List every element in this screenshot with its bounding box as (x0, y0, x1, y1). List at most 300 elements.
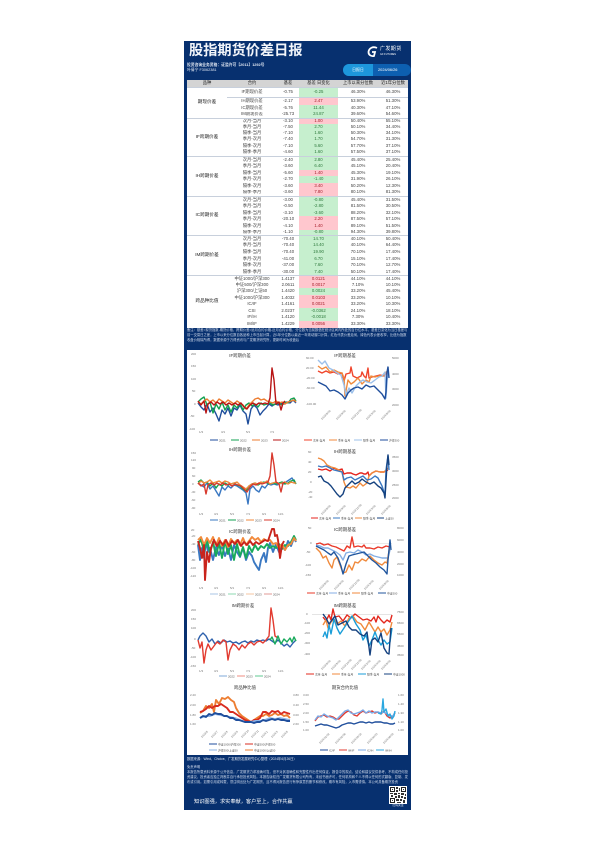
date pill: 2024/06/26 (378, 67, 397, 72)
basis and spread table: -3.60 (283, 183, 293, 188)
chart: cross-index ratio: 沪深300/上证50 (218, 748, 238, 752)
chart: IF basis: -20.00 (306, 376, 315, 380)
chart: IH spread seasonal: 2023 (255, 518, 262, 522)
chart: IF basis: 60.00 (306, 356, 314, 360)
chart: IF spread seasonal: 2021 (219, 438, 226, 442)
chart: cross-index ratio: 2023/9 (230, 730, 239, 739)
basis and spread table: 沪深300/上证50 (237, 288, 267, 293)
chart: IM basis: 2023/12/26 (350, 658, 363, 671)
basis and spread table: 33.20% (351, 288, 365, 293)
basis and spread table: 1.40 (314, 223, 323, 228)
basis and spread table: -3.10 (283, 210, 293, 215)
chart: IC spread seasonal: 1/3 (199, 586, 204, 590)
chart: IF basis: 2023/9/26 (335, 409, 347, 421)
chart: cross-index ratio: 2023/6 (200, 730, 209, 739)
chart: basket ratio: 1.00 (398, 728, 404, 732)
basis and spread table: -7.40 (283, 136, 293, 141)
chart: IC spread seasonal: -80 (191, 558, 196, 562)
basis and spread table: 37.10% (386, 143, 400, 148)
basis and spread table: 14.70 (313, 236, 324, 241)
basis and spread table: 次月-当月 (243, 197, 261, 202)
chart: basket ratio: IC/IH (367, 748, 373, 752)
basis and spread table: -20.10 (282, 216, 294, 221)
basis and spread table: 30.50% (386, 203, 400, 208)
chart: basket ratio: 2024/02/06 (334, 732, 347, 745)
chart: IM spread seasonal: 2022 (228, 674, 235, 678)
chart: IM basis: 3500 (397, 653, 404, 657)
basis and spread table: 隔季-当月 (243, 210, 261, 215)
basis and spread table: 1.60 (314, 149, 323, 154)
chart: IF spread seasonal: 5/1 (246, 430, 251, 434)
basis and spread table: -2.70 (283, 176, 293, 181)
chart: IC basis: 中证500 (387, 592, 398, 596)
basis and spread table: IH期现价差 (241, 98, 263, 103)
chart: IM basis: 2023/10/26 (340, 658, 353, 671)
basis and spread table: 19.10% (386, 170, 400, 175)
basis and spread table: 2.47 (314, 98, 323, 103)
basis and spread table: 40.10% (351, 236, 365, 241)
chart: IC basis: -150 (305, 573, 311, 577)
chart: IF basis: 2024/3/26 (365, 409, 377, 421)
basis and spread table: 2.20 (314, 216, 323, 221)
basis and spread table: 51.50% (386, 223, 400, 228)
chart: IF spread seasonal: 50 (192, 389, 196, 393)
risk disclaimer: 免责声明 (187, 764, 200, 768)
chart: IC basis: 2023/9/26 (333, 579, 345, 591)
basis and spread table: 7.60 (314, 262, 323, 267)
chart: IF basis: 季月-当月 (338, 438, 350, 442)
chart: IC spread seasonal: 2022 (237, 592, 244, 596)
chart: IC basis: 0 (310, 541, 312, 545)
basis and spread table: 50.40% (351, 118, 365, 123)
chart: basket ratio: 2024/03/18 (350, 732, 363, 745)
chart: cross-index ratio: 1.60 (190, 722, 196, 726)
basis and spread table: 季月-当月 (243, 242, 261, 247)
basis and spread table: -5.76 (283, 105, 293, 110)
basis and spread table: 45.40% (386, 288, 400, 293)
chart: IF basis: 沪深300 (389, 438, 400, 442)
basis and spread table: 15.10% (351, 256, 365, 261)
chart: IH spread seasonal: 5/1 (230, 512, 235, 516)
basis and spread table: CSI (248, 308, 256, 313)
basis and spread table: -1.40 (314, 176, 323, 181)
chart: IF basis: 2000 (392, 403, 399, 407)
chart: cross-index ratio: 2023/7 (210, 730, 219, 739)
chart: IM basis: -100 (304, 621, 310, 625)
basis and spread table: 53.90% (351, 98, 365, 103)
chart: IH spread seasonal: -30 (191, 490, 196, 494)
chart: IM spread seasonal: 2023 (246, 674, 253, 678)
chart: IC spread seasonal: -60 (191, 550, 196, 554)
basis and spread table: 品种 (203, 80, 211, 85)
basis and spread table: 24.10% (351, 308, 365, 313)
basis and spread table: -70.40 (282, 236, 294, 241)
chart: IC basis: 2024/3/26 (363, 579, 375, 591)
basis and spread table: -0.75 (283, 89, 293, 94)
chart: basket ratio: IM/IH (385, 748, 392, 752)
basis and spread table: 31.30% (386, 136, 400, 141)
chart: IF spread seasonal (189, 352, 296, 442)
chart: IH spread seasonal: 120 (191, 458, 196, 462)
chart: IC spread seasonal: -100 (190, 566, 196, 570)
chart: IF basis: 2023/6/26 (320, 409, 332, 421)
chart: IM spread seasonal: 1/3 (199, 669, 204, 673)
basis and spread table: 57.70% (351, 143, 365, 148)
basis and spread table: 81.50% (351, 203, 365, 208)
basis and spread table: 33.20% (351, 295, 365, 300)
date pill (343, 64, 411, 76)
chart: IH spread seasonal: IH跨期价差 (229, 446, 252, 453)
chart: IM spread seasonal: -50 (191, 646, 196, 650)
basis and spread table: 中证500/沪深300 (236, 282, 268, 287)
analyst credentials: 投资咨询业务资格：证监许可【2011】1292号 (187, 63, 264, 67)
basis and spread table: 1.4229 (281, 321, 295, 326)
chart: IF spread seasonal: 2024 (282, 438, 289, 442)
chart: IM spread seasonal: 2024 (264, 674, 271, 678)
basis and spread table: -4.60 (283, 149, 293, 154)
chart: basket ratio: 2024/01/02 (318, 732, 331, 745)
basis and spread table: 47.10% (386, 105, 400, 110)
basis and spread table: 期现价差 (198, 99, 216, 104)
chart: IM spread seasonal: 200 (191, 608, 196, 612)
chart: IM spread seasonal: 5/1 (230, 669, 235, 673)
chart: IF basis: 4000 (392, 372, 399, 376)
chart: IM spread seasonal: 150 (191, 617, 196, 621)
chart: cross-index ratio: 3.00 (293, 713, 299, 717)
basis and spread table: 18.10% (386, 308, 400, 313)
icon: company logo: GF FUTURES (380, 53, 396, 56)
chart: IM basis: 隔季-当月 (367, 672, 379, 676)
data source note: 数据来源：Wind、Choice、广发期货发展研究中心整理（2024年6月26日） (187, 756, 297, 760)
basis and spread table: IF/IH (247, 314, 257, 319)
chart: IH spread seasonal: -60 (191, 498, 196, 502)
chart: IC basis (305, 526, 404, 596)
basis and spread table: -3.60 (283, 163, 293, 168)
chart: IM basis: IM跨期基差 (334, 602, 357, 609)
chart: IF basis: -60.00 (306, 386, 315, 390)
basis and spread table: IH跨期价差 (196, 173, 218, 178)
icon: company logo: 广发期货 (380, 46, 402, 52)
basis and spread table: -7.10 (283, 143, 293, 148)
basis and spread table: 45.40% (351, 157, 365, 162)
chart: IC spread seasonal: -20 (191, 534, 196, 538)
QR caption: 扫码关注 (392, 803, 404, 807)
chart: IF spread seasonal: 1/3 (199, 430, 204, 434)
basis and spread table: 近1年分位数 (381, 80, 405, 85)
date pill: 日报日 (352, 67, 364, 72)
chart: IF spread seasonal: IF跨期价差 (229, 352, 251, 359)
basis and spread table: 57.50% (351, 149, 365, 154)
basis and spread table: -3.00 (283, 197, 293, 202)
chart: IM spread seasonal: 100 (191, 626, 196, 630)
chart: IF basis: 5000 (392, 356, 399, 360)
chart: IF basis: IF跨期基差 (334, 352, 356, 359)
chart: basket ratio: IM/IF (348, 748, 355, 752)
basis and spread table: 隔季-次月 (243, 143, 261, 148)
basis and spread table: 季月-次月 (243, 176, 261, 181)
basis and spread table: -5.60 (283, 170, 293, 175)
basis and spread table: IM/IF (247, 321, 257, 326)
chart: IM basis: 中证1000 (393, 672, 405, 676)
basis and spread table: 33.30% (351, 321, 365, 326)
chart: IC basis: 1000 (397, 573, 404, 577)
chart: IF basis: 次月-当月 (313, 438, 325, 442)
chart: IF spread seasonal: 100 (191, 377, 196, 381)
chart: cross-index ratio: 中证500/沪深300 (254, 742, 276, 746)
basis and spread table: 20.40% (386, 163, 400, 168)
chart: IM spread seasonal (190, 602, 296, 678)
basis and spread table: IF期现价差 (241, 89, 262, 94)
chart: IF spread seasonal: 3/1 (221, 430, 226, 434)
basis and spread table: 1.00 (314, 118, 323, 123)
chart: IC basis: 次月-当月 (316, 592, 328, 596)
chart: basket ratio: 1.40 (398, 702, 404, 706)
basis and spread table: 1.40 (314, 170, 323, 175)
chart: IH basis: -20 (308, 490, 313, 494)
basis and spread table: 31.90% (351, 176, 365, 181)
basis and spread table: -2.80 (314, 203, 323, 208)
basis and spread table: 隔季-次月 (243, 183, 261, 188)
chart: IH basis: 2023/6/26 (320, 504, 332, 516)
basis and spread table: 次月-当月 (243, 157, 261, 162)
chart: IH basis: 季月-当月 (341, 516, 353, 520)
chart: IM spread seasonal: 0 (194, 637, 196, 641)
basis and spread table: 1.4032 (281, 295, 295, 300)
QR code (389, 786, 407, 804)
chart: IF basis: 2023/12/26 (350, 408, 363, 421)
chart: IH basis: 20 (308, 470, 312, 474)
basis and spread table: -41.00 (282, 256, 294, 261)
analyst credentials: 叶倩宁 F3062381 (187, 68, 217, 72)
basis and spread table: 12.30% (386, 183, 400, 188)
basis and spread table: 季月-当月 (243, 203, 261, 208)
chart: basket ratio: 2.00 (303, 711, 309, 715)
chart: IM basis: 5500 (397, 632, 404, 636)
basis and spread table (187, 80, 408, 328)
chart: IH basis: IH跨期基差 (334, 448, 357, 455)
chart: IH basis: 2500 (392, 483, 399, 487)
basis and spread table: 2.80 (314, 157, 323, 162)
chart: IM spread seasonal: -100 (190, 655, 196, 659)
basis and spread table: 0.0024 (312, 288, 325, 293)
chart: IH spread seasonal: 2022 (237, 518, 244, 522)
chart: IC spread seasonal: IC跨期价差 (229, 528, 252, 535)
chart: cross-index ratio: 2023/11 (250, 729, 260, 739)
basis and spread table: 中证1000/沪深300 (234, 276, 270, 281)
basis and spread table: 46.30% (386, 89, 400, 94)
basis and spread table: 隔季-季月 (243, 149, 261, 154)
basis and spread table: 3.40 (314, 183, 323, 188)
basis and spread table: 17.40% (386, 249, 400, 254)
chart: IC spread seasonal (190, 528, 296, 596)
chart: IH spread seasonal: -90 (191, 506, 196, 510)
chart: basket ratio: 3.00 (303, 693, 309, 697)
basis and spread table: 季月-次月 (243, 216, 261, 221)
chart: IM basis: 次月-当月 (315, 672, 327, 676)
chart: IF spread seasonal: 150 (191, 364, 196, 368)
basis and spread table: 1.4120 (281, 314, 295, 319)
basis and spread table: 10.10% (386, 282, 400, 287)
basis and spread table: 季月-当月 (243, 163, 261, 168)
basis and spread table: 基差 日变化 (307, 80, 330, 85)
chart: IC basis: IC跨期基差 (334, 526, 357, 533)
basis and spread table: 0.0121 (312, 276, 325, 281)
basis and spread table: IF跨期价差 (196, 134, 218, 139)
chart: IM basis: 4500 (397, 644, 404, 648)
chart: IM basis: 2024/4/26 (370, 659, 382, 671)
chart: IH basis: 2023/9/26 (335, 504, 347, 516)
chart: IC spread seasonal: -40 (191, 542, 196, 546)
chart: IM basis: -300 (304, 641, 310, 645)
basis and spread table: 50.40% (386, 236, 400, 241)
basis and spread table: IC跨期价差 (196, 212, 218, 217)
chart: IH spread seasonal: 150 (191, 451, 196, 455)
basis and spread table: 1.4137 (281, 276, 295, 281)
basis and spread table: 45.10% (351, 163, 365, 168)
chart: basket ratio (303, 684, 404, 752)
basis and spread table: -2.40 (283, 157, 293, 162)
chart: IH spread seasonal: 0 (192, 482, 194, 486)
basis and spread table: -70.40 (282, 249, 294, 254)
basis and spread table: 31.50% (386, 197, 400, 202)
basis and spread table: -3.60 (314, 210, 323, 215)
basis and spread table: 51.30% (386, 98, 400, 103)
chart: IF spread seasonal: 2023 (261, 438, 268, 442)
basis and spread table: 70.10% (351, 249, 365, 254)
basis and spread table: 隔季-次月 (243, 262, 261, 267)
basis and spread table: IM跨期价差 (195, 252, 219, 257)
basis and spread table: -0.25 (314, 89, 323, 94)
basis and spread table: 40.10% (351, 242, 365, 247)
chart: basket ratio: 1.60 (398, 693, 404, 697)
chart: IH basis: 3500 (392, 455, 399, 459)
charts panel (187, 350, 408, 755)
chart: IC spread seasonal: 11/1 (278, 586, 284, 590)
chart: IM basis: -400 (304, 652, 310, 656)
risk disclaimer: 本报告所载资料来源于公开信息，广发期货力求准确可靠，但不对其准确性和完整性作出任何保证。报告中的观点、结论和建议仅供参考，不构成任何投资建议，投资者应独立判断并自行承担投资风险。本报告版权归广发期货有限公司所有，未经书面许可，任何机构和个人不得以任何形式翻版、复制、发布或引用。如需引用或转载，须注明出处为广发期货，且不得对报告进行有悖原意的删节和修改。期市有风险，入市需谨慎。本公司具备期货投资 (187, 770, 408, 784)
chart: IM spread seasonal: 7/1 (246, 669, 251, 673)
basis and spread table: 44.10% (351, 276, 365, 281)
basis and spread table: -2.17 (283, 98, 293, 103)
basis and spread table: 6.70 (314, 256, 323, 261)
chart: IC basis: 50 (308, 526, 312, 530)
basis and spread table: 1.70 (314, 136, 323, 141)
basis and spread table: 32.10% (386, 210, 400, 215)
chart: IC basis: -50 (306, 550, 311, 554)
basis and spread table: 2.0611 (282, 282, 294, 287)
chart: basket ratio: 2.50 (303, 702, 309, 706)
table footnote: 备注：基差=现货指数-期货价格，跨期价差=远月合约价格-近月合约价格，分位数为当前数值在统计区间内所处的百分位水平，基差日变化为当日基差与前一交易日之差，上市以来分位数自各品种上市日起计算，近1年分位数以最近一年滚动窗口计算，红色代表价差走阔，绿色代表价差收窄，比值为指数收盘价相除所得，数据来源于万得资讯与广发期货研究所，更新时间为收盘后 (187, 328, 407, 342)
chart: IM basis: 2023/8/26 (330, 659, 342, 671)
basis and spread table: IC期现价差 (241, 105, 263, 110)
basis and spread table: 87.50% (351, 216, 365, 221)
basis and spread table: 隔季-当月 (243, 170, 261, 175)
basis and spread table: 季月-次月 (243, 136, 261, 141)
chart: IH basis: 隔季-当月 (363, 516, 375, 520)
analyst credentials (187, 62, 264, 72)
chart: IH spread seasonal: 2024 (273, 518, 280, 522)
chart: IF spread seasonal: 200 (191, 352, 196, 356)
basis and spread table: 次月-当月 (243, 118, 261, 123)
chart: IM spread seasonal: 3/1 (214, 669, 219, 673)
basis and spread table: 12.70% (386, 262, 400, 267)
chart: IC spread seasonal: 3/1 (214, 586, 219, 590)
chart: IC basis: 2023/12/26 (348, 578, 361, 591)
chart: basket ratio: 1.30 (398, 711, 404, 715)
chart: basket ratio: 2024/04/23 (366, 732, 379, 745)
basis and spread table: 次月-当月 (243, 236, 261, 241)
basis and spread table: 10.40% (386, 314, 400, 319)
chart: cross-index ratio: 2023/10 (240, 728, 250, 739)
basis and spread table: 70.10% (351, 262, 365, 267)
chart: IC basis: 8000 (397, 526, 404, 530)
chart: IM spread seasonal: 11/1 (278, 669, 284, 673)
title: 股指期货价差日报 (189, 43, 303, 59)
chart: cross-index ratio: 2024/6 (280, 730, 289, 739)
basis and spread table: 上市以来分位数 (343, 80, 373, 85)
chart: cross-index ratio: 2.20 (190, 693, 196, 697)
basis and spread table: 40.30% (351, 105, 365, 110)
icon: company logo (368, 46, 402, 57)
chart: cross-index ratio: 2024/3 (270, 730, 279, 739)
basis and spread table: 0.0056 (312, 321, 325, 326)
chart: IM spread seasonal: IM跨期价差 (232, 602, 255, 609)
chart: IF basis (304, 352, 400, 442)
basis and spread table: 10.10% (386, 295, 400, 300)
basis and spread table: 37.10% (386, 149, 400, 154)
chart: cross-index ratio: 2.00 (190, 703, 196, 707)
chart: IM spread seasonal: 9/1 (262, 669, 267, 673)
chart: basket ratio: IC/IF (329, 748, 335, 752)
chart: cross-index ratio: 1.80 (190, 713, 196, 717)
chart: IF spread seasonal: 7/1 (270, 430, 275, 434)
basis and spread table: 46.30% (351, 89, 365, 94)
basis and spread table: 17.40% (386, 256, 400, 261)
chart: IC basis: 4000 (397, 550, 404, 554)
basis and spread table: 57.10% (386, 216, 400, 221)
chart: cross-index ratio: 3.80 (293, 693, 299, 697)
basis and spread table: 合约 (248, 80, 256, 85)
chart: cross-index ratio: 2.60 (293, 722, 299, 726)
basis and spread table: 26.10% (386, 176, 400, 181)
basis and spread table: 7.10% (352, 282, 364, 287)
basis and spread table: 0.0103 (312, 295, 325, 300)
chart: cross-index ratio (190, 684, 299, 752)
chart: IH basis: -40 (308, 495, 313, 499)
chart: IF spread seasonal: 0 (194, 402, 196, 406)
chart: IM basis: 2023/6/26 (320, 659, 332, 671)
chart: IF spread seasonal: 2022 (240, 438, 247, 442)
chart: IH basis: 上证50 (385, 516, 394, 520)
basis and spread table: -70.40 (282, 242, 294, 247)
slogan: 知识图强，求实奉献，客户至上，合作共赢 (194, 799, 293, 805)
chart: IH basis: 2000 (392, 496, 399, 500)
chart: IF basis: 3000 (392, 387, 399, 391)
chart: IC spread seasonal: 2024 (273, 592, 280, 596)
basis and spread table: 0.0017 (312, 282, 325, 287)
chart: IH basis: 60 (308, 450, 312, 454)
chart: IH spread seasonal: 11/1 (278, 512, 284, 516)
basis and spread table: 隔季-当月 (243, 249, 261, 254)
basis and spread table: 基差 (284, 80, 292, 85)
chart: cross-index ratio: 2024/1 (260, 730, 269, 739)
basis and spread table: 季月-次月 (243, 256, 261, 261)
chart: IH basis: 0 (310, 480, 312, 484)
basis and spread table: -37.00 (282, 262, 294, 267)
basis and spread table: 2.0237 (281, 308, 295, 313)
chart: cross-index ratio: 2023/8 (220, 730, 229, 739)
basis and spread table: 7.30% (352, 314, 364, 319)
